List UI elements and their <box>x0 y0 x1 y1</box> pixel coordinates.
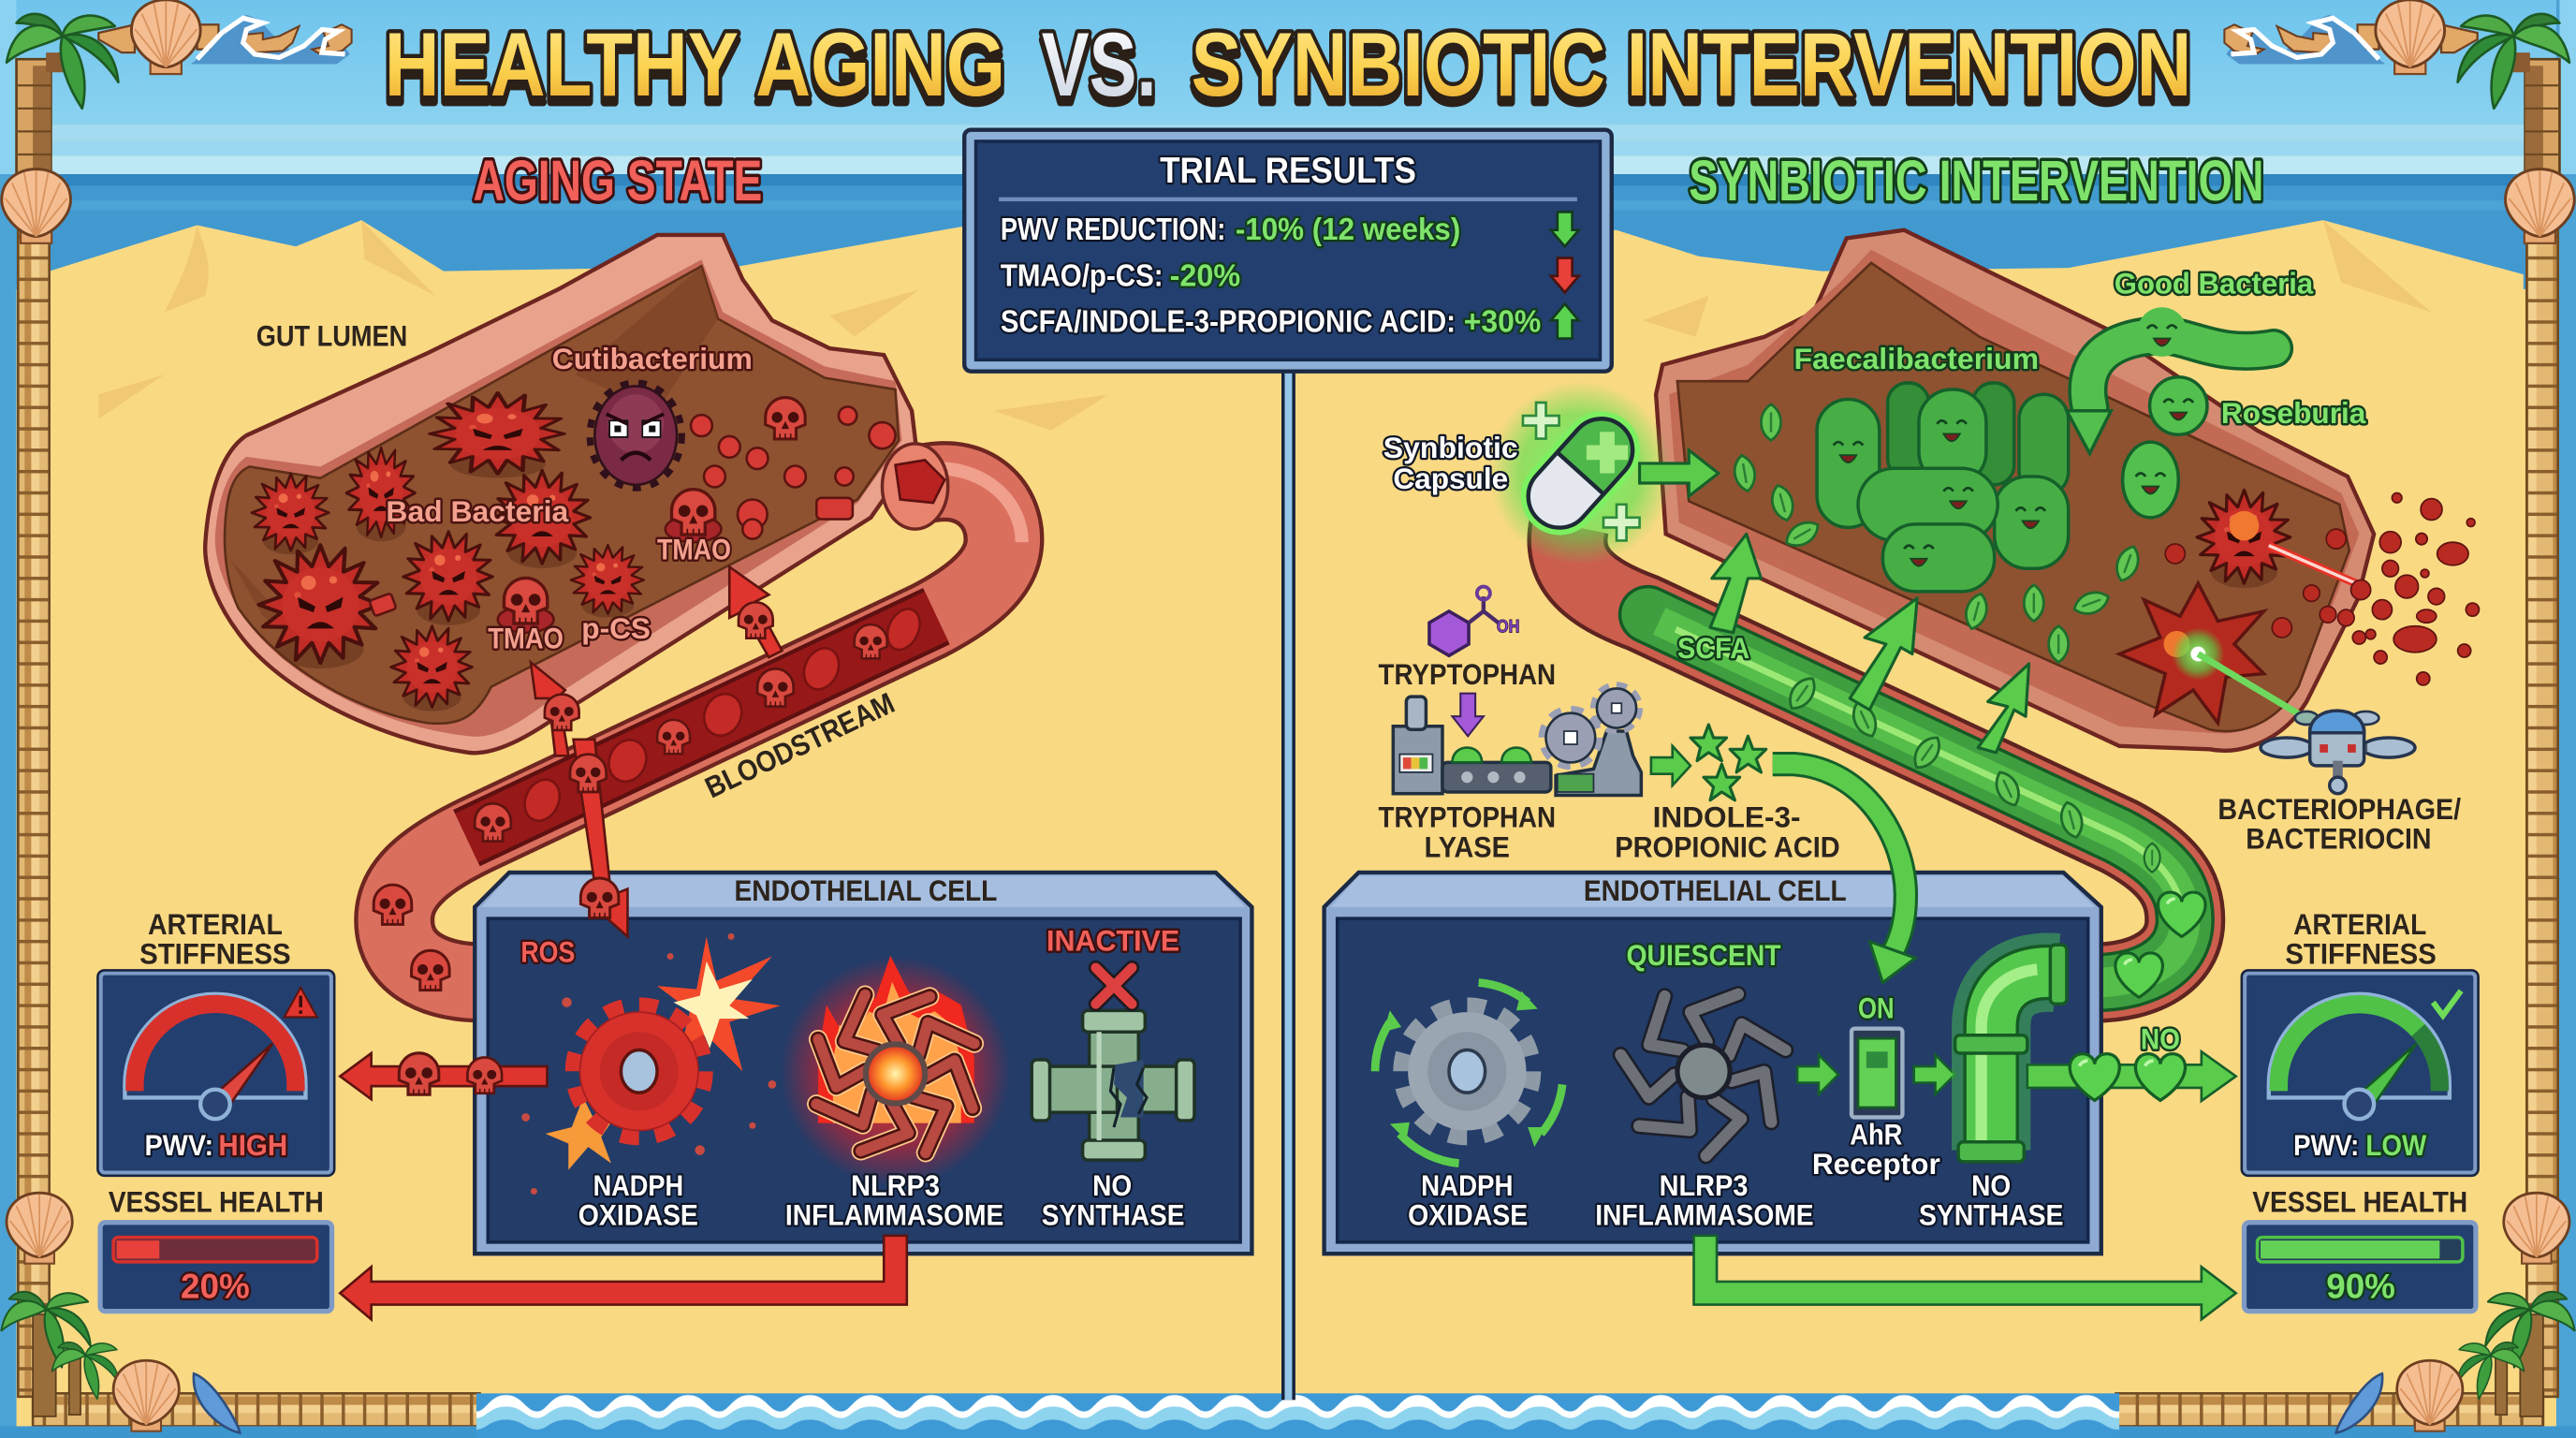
blood vessel: aging <box>373 444 1022 990</box>
icon: bottom-right palms and shells <box>2336 1193 2575 1432</box>
label: bacteriophage/bacteriocin: BACTERIOPHAGE/ <box>2217 792 2461 826</box>
label: p-CS: p-CS <box>581 611 651 645</box>
label: synbiotic capsule <box>1383 431 1518 495</box>
panel: healthy endothelial cell <box>1325 873 2101 1254</box>
arrow: toxins rising into the gut <box>531 567 782 756</box>
icon: toxic skulls and molecules in the gut <box>369 398 896 633</box>
icon: pathogens destroyed by bacteriocin <box>2119 490 2479 723</box>
icon: bacteriophage <box>2261 711 2415 794</box>
row: PWV reduction: PWV REDUCTION: <box>1001 213 1225 247</box>
icon: bad bacteria colony <box>252 392 644 712</box>
label: TMAO upper: TMAO <box>657 533 731 566</box>
label: arterial stiffness left: ARTERIAL <box>148 907 283 941</box>
icon: synbiotic capsule <box>1488 381 1673 565</box>
label: arterial stiffness right <box>2285 907 2437 970</box>
label: NO synthase <box>1042 1168 1184 1231</box>
row: SCFA/indole-3-propionic acid: SCFA/INDOLE-3-PROPIONIC ACID: <box>1001 305 1456 340</box>
label: NO synthase: SYNTHASE <box>1042 1197 1184 1231</box>
label: Cutibacterium: Cutibacterium <box>552 342 753 375</box>
divider between the two states <box>1281 361 1295 1400</box>
label: endothelial cell: ENDOTHELIAL CELL <box>1584 873 1847 907</box>
arrow: AhR receptor to NO synthase <box>1914 1055 1955 1094</box>
panel: vessel health 90% <box>2244 1223 2476 1312</box>
icon: probiotic leaves in the gut <box>1732 404 2143 662</box>
arrow: indole to AhR receptor <box>1773 764 1915 983</box>
label: AhR receptor: AhR <box>1850 1117 1903 1151</box>
arrow: SCFA rising into the gut <box>1710 534 2029 753</box>
arrow: tryptophan to lyase <box>1453 694 1484 736</box>
label: NO synthase: NO <box>1092 1168 1132 1202</box>
arrow: capsule into gut <box>1640 450 1719 496</box>
label: NLRP3 inflammasome <box>785 1168 1003 1231</box>
icon: NADPH oxidase gear, calm <box>1375 983 1562 1164</box>
arrow: inflammasome to vessel health <box>340 1236 907 1319</box>
arrow: inflammasome to vessel health <box>1694 1236 2236 1319</box>
row: TMAO/p-CS: TMAO/p-CS: <box>1001 258 1164 293</box>
panel: synbiotic gut lumen <box>1656 230 2374 751</box>
label: TMAO lower: TMAO <box>488 621 564 654</box>
label: NADPH oxidase: OXIDASE <box>1408 1197 1528 1231</box>
icon: good bacteria and roseburia <box>2067 307 2274 518</box>
panel: arterial stiffness gauge high: HIGH <box>218 1128 287 1162</box>
label: tryptophan lyase: TRYPTOPHAN <box>1379 800 1556 834</box>
label: tryptophan: TRYPTOPHAN <box>1379 657 1556 691</box>
icon: sea waves along the bottom <box>476 1393 2119 1438</box>
icon: AhR receptor switch <box>1852 1029 1902 1117</box>
label: indole-3-propionic acid: PROPIONIC ACID <box>1615 829 1840 863</box>
icon: NADPH oxidase gear, active <box>521 933 781 1195</box>
blood vessel: synbiotic <box>1567 526 2205 997</box>
icon: NLRP3 inflammasome, quiet <box>1620 994 1786 1156</box>
panel: vessel health 20%: 20% <box>181 1268 250 1306</box>
title: VS. <box>1042 15 1157 115</box>
label: ON: ON <box>1858 990 1895 1024</box>
label: quiescent: QUIESCENT <box>1627 938 1781 972</box>
title <box>385 15 2191 115</box>
row: PWV reduction <box>1001 212 1579 247</box>
row: PWV reduction: -10% (12 weeks) <box>1236 213 1460 247</box>
label: NO: NO <box>2141 1022 2180 1056</box>
arrow: nitric oxide to arterial stiffness <box>2027 1051 2236 1101</box>
label: arterial stiffness right: STIFFNESS <box>2285 936 2437 970</box>
label: vessel health right: VESSEL HEALTH <box>2252 1184 2467 1218</box>
label: synbiotic capsule: Synbiotic <box>1383 431 1518 464</box>
panel: arterial stiffness gauge high <box>97 970 334 1176</box>
label: NO synthase: NO <box>1971 1168 2011 1202</box>
label: NADPH oxidase: NADPH <box>1421 1168 1513 1202</box>
heading: synbiotic intervention: SYNBIOTIC INTERVENTION <box>1689 149 2264 213</box>
label: NLRP3 inflammasome: NLRP3 <box>1660 1168 1748 1202</box>
label: NLRP3 inflammasome: INFLAMMASOME <box>1595 1197 1814 1231</box>
label: indole-3-propionic acid <box>1615 800 1840 863</box>
icon: NLRP3 inflammasome, burning <box>781 956 1010 1186</box>
label: vessel health left: VESSEL HEALTH <box>109 1184 324 1218</box>
label: AhR receptor: Receptor <box>1812 1147 1940 1181</box>
icon: top-right palm, shell and wave decoration <box>2224 0 2574 243</box>
label: NO synthase: SYNTHASE <box>1919 1197 2063 1231</box>
label: indole-3-propionic acid: INDOLE-3- <box>1653 800 1801 834</box>
label: bacteriophage/bacteriocin: BACTERIOCIN <box>2246 822 2432 856</box>
label: arterial stiffness left: STIFFNESS <box>139 936 291 970</box>
icon: tryptophan molecule <box>1429 587 1519 655</box>
heading: trial results: TRIAL RESULTS <box>1160 151 1416 191</box>
panel: vessel health 20% <box>100 1223 332 1312</box>
icon: tryptophan molecule: OH <box>1497 618 1519 638</box>
label: NADPH oxidase <box>578 1168 698 1231</box>
label: AhR receptor <box>1812 1117 1940 1181</box>
panel: aging gut lumen <box>205 235 916 753</box>
label: endothelial cell: ENDOTHELIAL CELL <box>735 873 997 907</box>
icon: inactive X <box>1096 968 1132 1004</box>
row: TMAO/p-CS <box>1001 258 1579 293</box>
arrow: inflammasome to AhR receptor <box>1797 1055 1838 1094</box>
label: roseburia: Roseburia <box>2221 396 2366 430</box>
icon: tryptophan lyase factory <box>1393 688 1641 795</box>
label: tryptophan lyase <box>1379 800 1556 863</box>
icon: indole stars <box>1690 725 1766 800</box>
label: arterial stiffness left <box>139 907 291 970</box>
icon: NO synthase pipe, healthy <box>1955 945 2067 1162</box>
label: bad bacteria: Bad Bacteria <box>386 494 569 528</box>
label: ROS: ROS <box>520 935 575 969</box>
panel: vessel health 90%: 90% <box>2326 1268 2395 1306</box>
icon: top-left palm, shell and wave decoration <box>2 0 352 243</box>
label: NO synthase <box>1919 1168 2063 1231</box>
panel: arterial stiffness gauge low <box>2242 970 2479 1176</box>
label: inactive: INACTIVE <box>1046 923 1179 957</box>
label: arterial stiffness right: ARTERIAL <box>2293 907 2426 941</box>
panel: arterial stiffness gauge high: PWV: <box>144 1128 213 1162</box>
label: NLRP3 inflammasome: INFLAMMASOME <box>785 1197 1003 1231</box>
heading: aging state: AGING STATE <box>473 149 762 213</box>
label: NADPH oxidase <box>1408 1168 1528 1231</box>
label: good bacteria: Good Bacteria <box>2115 266 2314 300</box>
panel: trial results <box>964 130 1612 372</box>
label: bloodstream: BLOODSTREAM <box>699 685 900 804</box>
icon: NO synthase, cracked pipe <box>1032 1010 1194 1160</box>
arrow: lyase to indole <box>1651 746 1690 785</box>
panel: arterial stiffness gauge low: PWV: <box>2293 1128 2359 1162</box>
label: tryptophan lyase: LYASE <box>1425 829 1510 863</box>
label: bacteriophage/bacteriocin <box>2217 792 2461 856</box>
panel: arterial stiffness gauge low: LOW <box>2365 1128 2426 1162</box>
label: NLRP3 inflammasome: NLRP3 <box>851 1168 940 1202</box>
row: TMAO/p-CS: -20% <box>1170 258 1240 293</box>
label: NLRP3 inflammasome <box>1595 1168 1814 1231</box>
label: faecalibacterium: Faecalibacterium <box>1794 342 2039 375</box>
icon: bottom-left palms and shells <box>1 1193 240 1432</box>
icon: Cutibacterium <box>590 383 681 488</box>
title: HEALTHY AGING <box>385 15 1005 115</box>
row: SCFA/indole-3-propionic acid: +30% <box>1464 305 1541 340</box>
panel: aging endothelial cell <box>475 873 1251 1254</box>
label: NADPH oxidase: NADPH <box>593 1168 683 1202</box>
icon: faecalibacterium cluster <box>1817 383 2069 592</box>
arrow: toxins entering endothelial cell <box>570 740 627 936</box>
label: NADPH oxidase: OXIDASE <box>578 1197 698 1231</box>
label: gut lumen: GUT LUMEN <box>256 318 407 352</box>
arrow: ROS to arterial stiffness <box>340 1053 547 1099</box>
label: synbiotic capsule: Capsule <box>1393 462 1508 495</box>
label: SCFA: SCFA <box>1677 631 1749 665</box>
title: SYNBIOTIC INTERVENTION <box>1191 15 2191 115</box>
